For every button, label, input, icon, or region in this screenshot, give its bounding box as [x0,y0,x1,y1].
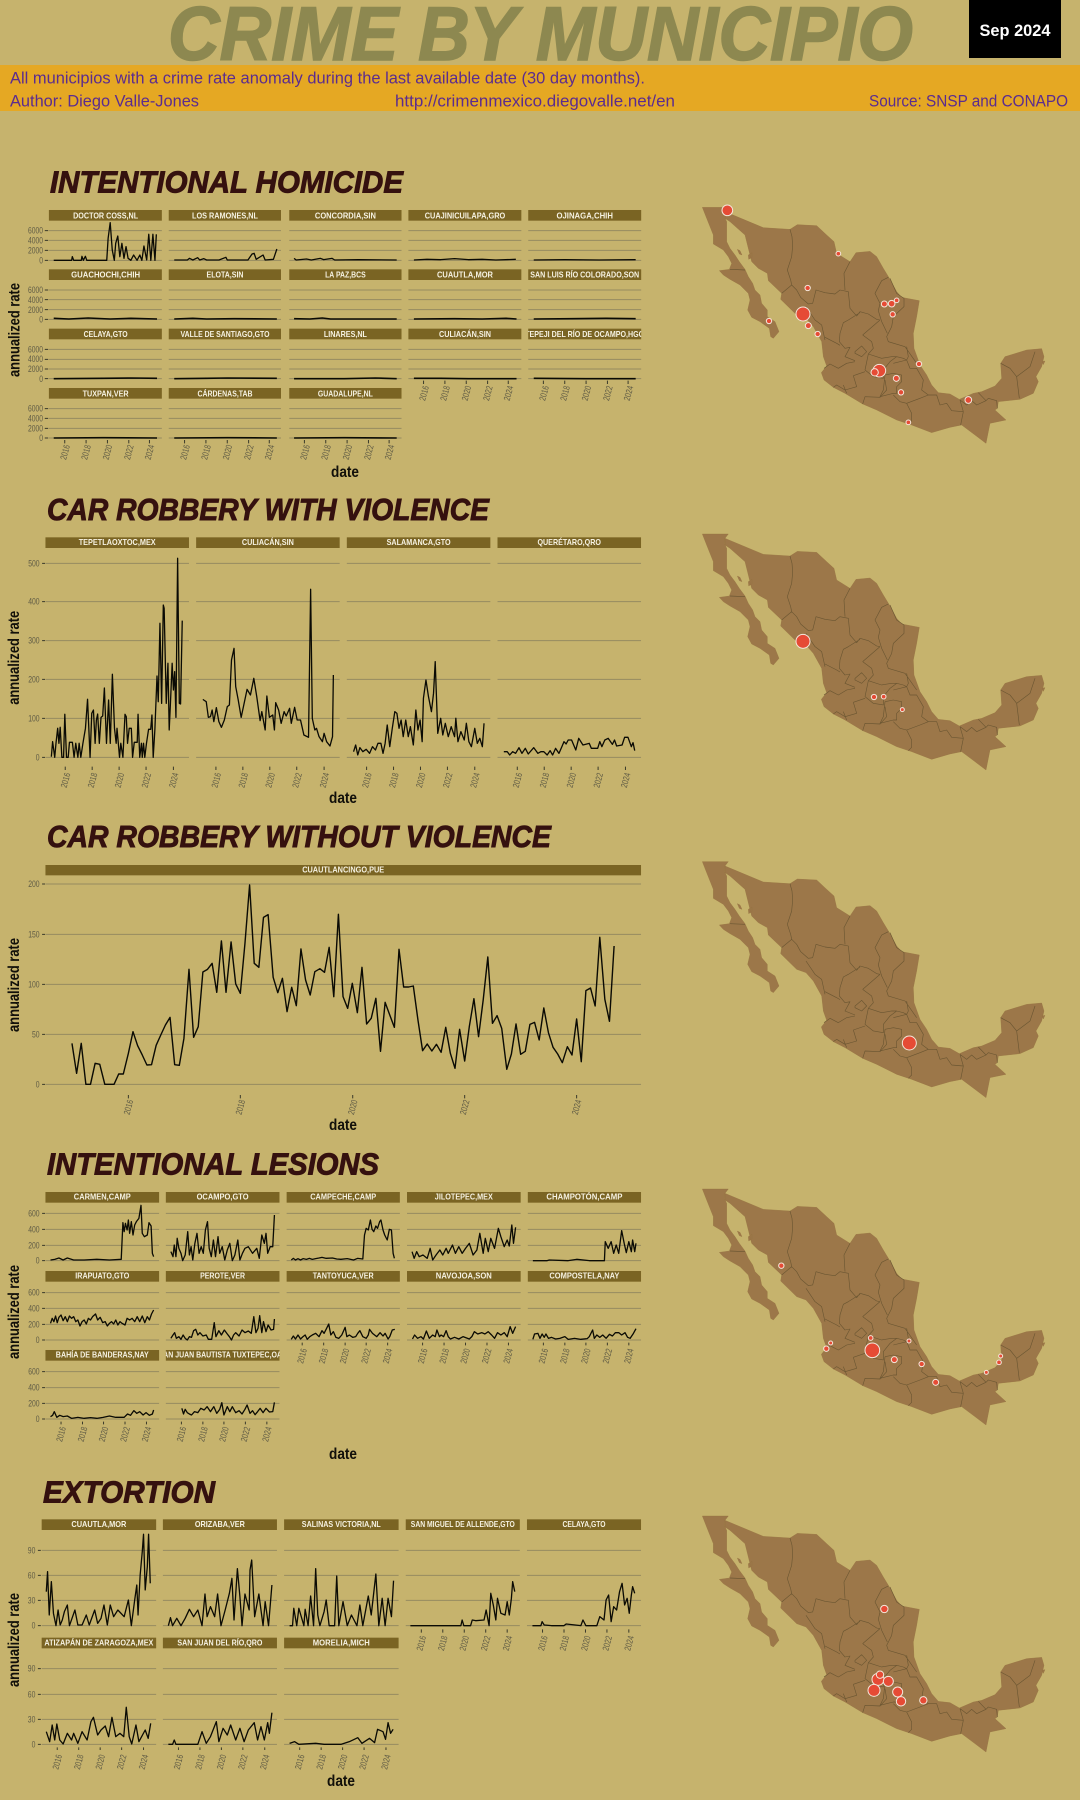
panel: Irapuato [45,1271,159,1340]
panel: Culiacan [196,537,340,757]
x axis labels: 2024 [622,385,635,402]
y axis labels: 4000 [28,354,43,364]
x axis labels: 2020 [215,1753,228,1770]
author: Author: Diego Valle-Jones [10,92,199,110]
panel: Tepeji del Rio de Ocampo: TEPEJI DEL RÍO DE OCAMPO,HGO [525,329,645,339]
axis title: annualized rate: annualized rate [6,610,23,705]
panel: Celaya [527,1519,641,1626]
x axis labels: 2016 [175,1426,188,1443]
y axis labels: 4000 [28,413,43,423]
x axis labels: 2020 [579,1635,593,1652]
x axis labels: 2020 [221,444,234,461]
panel: Tantoyuca [287,1271,400,1340]
panel: Champoton [528,1191,641,1261]
panel: Morelia [284,1637,399,1744]
y axis labels: 0 [36,1335,40,1345]
axis title: annualized rate: annualized rate [6,1593,23,1687]
panel: Navojoa: NAVOJOA,SON [436,1271,492,1281]
x axis labels: 2022 [601,385,615,402]
description: All municipios with a crime rate anomaly during the last available date (30 day months). [10,69,645,87]
x axis labels: 2016 [511,772,524,789]
panel: Cardenas [169,388,281,438]
panel: Campeche [287,1192,400,1261]
x axis labels: 2022 [458,1099,471,1116]
section: car robbery with violence [6,492,1045,807]
axis title: date: date [329,790,357,807]
x axis labels: 2016 [536,1635,550,1652]
x axis labels: 2024 [318,772,331,789]
x axis labels: 2024 [570,1099,583,1116]
y axis labels: 200 [28,1240,40,1250]
x axis labels: 2020 [579,1347,593,1364]
x axis labels: 2018 [72,1753,86,1770]
x axis labels: 2016 [58,444,72,461]
panel: Guachochi [49,269,162,319]
x axis labels: 2018 [437,1347,451,1364]
panel: Tepetlaoxtoc [45,537,189,757]
panel: Morelia: MORELIA,MICH [313,1637,370,1647]
x axis labels: 2016 [416,1347,429,1364]
y axis labels: 0 [39,315,43,325]
panel: La Paz [289,269,402,319]
y axis labels: 30 [28,1595,35,1605]
panel: Tepeji del Rio de Ocampo [525,329,645,379]
panel: Atizapan de Zaragoza [42,1637,156,1744]
x axis labels: 2024 [263,444,276,461]
x axis labels: 2020 [263,772,277,789]
x axis labels: 2024 [167,772,181,789]
axis title: date: date [327,1773,355,1790]
panel: San Juan del Rio [163,1637,277,1744]
y axis labels: 100 [28,713,40,723]
section: intentional homicide [6,164,1045,481]
y axis labels [28,879,45,1089]
x axis labels: 2024 [501,1635,514,1652]
panel: San Luis Rio Colorado [528,269,641,319]
y axis labels: 200 [28,674,40,684]
x axis labels: 2022 [118,1426,132,1443]
date badge: Sep 2024 [980,22,1051,40]
panel: Navojoa [407,1271,521,1340]
panel: Doctor Coss: DOCTOR COSS,NL [73,210,138,220]
x axis labels: 2016 [54,1426,68,1443]
x axis labels: 2024 [622,1635,636,1652]
x axis labels: 2024 [468,772,482,789]
x axis labels: 2020 [346,1099,360,1116]
y axis labels: 200 [28,1319,40,1329]
panel: Culiacan: CULIACÁN,SIN [439,329,491,339]
y axis labels: 60 [28,1570,35,1580]
panel: Salinas Victoria: SALINAS VICTORIA,NL [302,1519,381,1529]
x axis labels: 2018 [314,1753,328,1770]
x axis labels: 2020 [458,1635,471,1652]
panel: Compostela: COMPOSTELA,NAY [549,1271,620,1281]
x axis labels: 2020 [341,444,354,461]
map: car robbery without violence [702,862,1045,1098]
y axis labels: 2000 [28,246,43,256]
panel: Cuautlancingo: CUAUTLANCINGO,PUE [302,864,384,874]
x axis labels: 2020 [217,1426,231,1443]
x axis labels: 2016 [537,385,551,402]
x axis labels: 2022 [601,1347,614,1364]
x axis labels: 2018 [558,1347,572,1364]
y axis labels: 0 [39,433,43,443]
panel: Cuautla [42,1519,156,1626]
map: homicide [702,205,1045,443]
y axis labels [28,558,45,762]
y axis labels: 0 [36,1414,40,1424]
panel: Celaya: CELAYA,GTO [562,1519,606,1529]
map: extortion [702,1516,1045,1752]
panel: Campeche: CAMPECHE,CAMP [310,1192,376,1202]
panel: Champoton: CHAMPOTÓN,CAMP [546,1191,623,1202]
panel: Culiacan: CULIACÁN,SIN [242,537,294,547]
axis title: date: date [329,1117,357,1134]
x axis labels: 2022 [290,772,304,789]
x axis labels [122,1095,583,1116]
axis title: date: date [331,464,359,481]
axis title: annualized rate: annualized rate [6,938,23,1032]
panel: Valle de Santiago [169,329,281,379]
x axis labels [54,1343,636,1443]
url: http://crimenmexico.diegovalle.net/en [395,92,675,110]
y axis labels: 0 [36,752,40,762]
x axis labels: 2020 [101,444,114,461]
panel: Orizaba: ORIZABA,VER [195,1519,245,1529]
panel: Tuxpan: TUXPAN,VER [83,388,129,398]
panel: Culiacan [408,329,521,379]
panel: Carmen: CARMEN,CAMP [74,1192,131,1202]
panel: Los Ramones: LOS RAMONES,NL [192,210,258,220]
x axis labels: 2018 [538,772,551,789]
x axis labels: 2016 [293,1753,306,1770]
x axis labels [51,1629,636,1770]
x axis labels: 2016 [360,772,374,789]
panel: San Juan Bautista Tuxtepec [166,1350,280,1420]
y axis labels [28,226,48,443]
x axis labels: 2016 [298,444,312,461]
y axis labels: 0 [32,1621,35,1631]
x axis labels: 2024 [140,1426,153,1443]
panel: Cuajinicuilapa: CUAJINICUILAPA,GRO [425,210,506,220]
panel: San Juan Bautista Tuxtepec: SAN JUAN BAUTISTA TUXTEPEC,OAX [159,1350,287,1360]
y axis labels: 0 [32,1739,35,1749]
map: intentional lesions [702,1189,1045,1425]
x axis labels: 2020 [565,772,578,789]
panel: Carmen [45,1192,159,1261]
y axis labels: 0 [39,374,43,384]
panel: Cuautla: CUAUTLA,MOR [71,1519,126,1529]
x axis labels [59,767,632,789]
panel: Perote [166,1271,279,1340]
x axis labels: 2024 [258,1753,272,1770]
y axis labels: 600 [28,1288,40,1298]
panel: Guachochi: GUACHOCHI,CHIH [71,270,140,280]
x axis labels: 2016 [122,1099,135,1116]
x axis labels: 2024 [502,385,515,402]
info band [0,65,1080,111]
x axis labels: 2020 [414,772,428,789]
panel: Jilotepec: JILOTEPEC,MEX [435,1192,493,1202]
panel: Guadalupe: GUADALUPE,NL [318,388,373,398]
y axis labels: 2000 [28,423,43,433]
x axis labels: 2022 [479,1635,492,1652]
panel: Irapuato: IRAPUATO,GTO [75,1271,130,1281]
y axis labels: 2000 [28,364,43,374]
x axis labels: 2024 [619,772,632,789]
y axis labels: 500 [28,558,40,568]
panel: Concordia: CONCORDIA,SIN [315,210,376,220]
x axis labels: 2020 [580,385,593,402]
x axis labels: 2018 [199,444,213,461]
x axis labels: 2022 [357,1753,371,1770]
x axis labels: 2022 [236,1753,250,1770]
x axis labels: 2018 [558,385,572,402]
x axis labels: 2018 [79,444,93,461]
y axis labels: 0 [36,1079,40,1089]
x axis labels: 2022 [481,385,495,402]
panel: Salinas Victoria [284,1519,399,1626]
y axis labels: 60 [28,1689,35,1699]
axis title: annualized rate: annualized rate [6,283,24,377]
x axis labels: 2022 [122,444,136,461]
panel: Ocampo: OCAMPO,GTO [197,1192,249,1202]
date badge [969,0,1061,58]
y axis labels: 6000 [28,285,43,295]
x axis labels: 2016 [210,772,223,789]
y axis labels: 150 [28,929,40,939]
section: car robbery without violence [6,819,1045,1134]
x axis labels: 2016 [178,444,192,461]
panel: San Miguel de Allende: SAN MIGUEL DE ALLENDE,GTO [411,1519,515,1529]
panel: San Juan del Rio: SAN JUAN DEL RÍO,QRO [177,1637,263,1647]
x axis labels: 2024 [501,1347,515,1364]
x axis labels: 2022 [239,1426,252,1443]
panel: Los Ramones [169,210,281,260]
axis title: annualized rate: annualized rate [6,1265,23,1359]
heading: EXTORTION [43,1474,216,1510]
x axis labels: 2022 [592,772,605,789]
x axis labels: 2024 [381,1347,394,1364]
x axis labels: 2022 [601,1635,614,1652]
panel: Atizapan de Zaragoza: ATIZAPÁN DE ZARAGOZA,MEX [44,1637,154,1647]
x axis labels: 2024 [143,444,156,461]
y axis labels: 6000 [28,226,43,236]
x axis labels: 2018 [438,385,452,402]
y axis labels: 400 [28,1303,40,1313]
x axis labels: 2018 [558,1635,571,1652]
x axis labels: 2018 [436,1635,450,1652]
x axis labels: 2020 [458,1347,472,1364]
x axis labels: 2022 [362,444,376,461]
panel: Cuautlancingo [45,864,641,1084]
panel: Cuautla: CUAUTLA,MOR [437,270,493,280]
x axis labels: 2016 [172,1753,185,1770]
x axis labels: 2016 [295,1347,309,1364]
y axis labels: 4000 [28,236,43,246]
panel: Linares: LINARES,NL [324,329,367,339]
panel: Celaya [49,329,162,379]
heading: CAR ROBBERY WITHOUT VIOLENCE [47,819,552,854]
x axis labels: 2016 [537,1347,550,1364]
y axis labels: 0 [39,255,43,265]
x axis labels: 2018 [196,1426,210,1443]
x axis labels: 2018 [319,444,333,461]
x axis labels: 2018 [234,1099,247,1116]
y axis labels: 600 [28,1367,40,1377]
x axis labels: 2020 [94,1753,107,1770]
section: extortion [6,1474,1045,1790]
y axis labels: 30 [28,1714,35,1724]
x axis labels: 2020 [460,385,473,402]
x axis labels: 2022 [140,772,153,789]
panel: Tuxpan [49,388,162,438]
x axis labels: 2024 [260,1426,274,1443]
x axis labels: 2020 [336,1753,349,1770]
x axis labels: 2018 [86,772,99,789]
panel: Bahia de Banderas: BAHÍA DE BANDERAS,NAY [56,1350,149,1360]
panel: Queretaro: QUERÉTARO,QRO [537,537,601,547]
y axis labels: 200 [28,1398,40,1408]
panel: Cardenas: CÁRDENAS,TAB [198,388,252,398]
y axis labels: 90 [28,1545,35,1555]
panel: Perote: PEROTE,VER [200,1271,245,1281]
x axis labels: 2024 [137,1753,150,1770]
map: car robbery with violence [702,534,1045,770]
axis title: date: date [329,1446,357,1463]
x axis labels: 2022 [242,444,256,461]
y axis labels: 200 [28,879,40,889]
y axis labels: 4000 [28,295,43,305]
x axis labels: 2016 [59,772,72,789]
y axis labels: 50 [32,1029,40,1039]
source: Source: SNSP and CONAPO [869,92,1068,110]
x axis labels: 2018 [193,1753,207,1770]
panel: Guadalupe [289,388,402,438]
x axis labels: 2022 [441,772,454,789]
y axis labels: 0 [36,1256,40,1266]
panel: Jilotepec [407,1192,521,1261]
panel: La Paz: LA PAZ,BCS [325,270,366,280]
heading: CAR ROBBERY WITH VIOLENCE [47,492,490,527]
panel: Concordia [289,210,402,260]
x axis labels: 2024 [622,1347,636,1364]
x axis labels: 2022 [115,1753,128,1770]
x axis labels: 2024 [383,444,396,461]
panel: Tantoyuca: TANTOYUCA,VER [313,1271,374,1281]
panel: Cuajinicuilapa [408,210,521,260]
panel: Ojinaga [528,210,641,260]
x axis labels: 2018 [387,772,401,789]
panel: Doctor Coss [49,210,162,260]
panel: Elota: ELOTA,SIN [206,270,244,280]
y axis labels: 400 [28,1224,40,1234]
y axis labels: 300 [28,636,40,646]
x axis labels: 2016 [415,1635,428,1652]
panel: Queretaro [498,537,641,757]
x axis labels: 2018 [76,1426,89,1443]
panel: Ojinaga: OJINAGA,CHIH [556,210,613,220]
y axis labels: 100 [28,979,40,989]
y axis labels: 400 [28,597,40,607]
heading: INTENTIONAL HOMICIDE [50,164,404,200]
x axis labels: 2020 [113,772,126,789]
y axis labels [28,1545,41,1749]
panel: Salamanca: SALAMANCA,GTO [387,537,451,547]
y axis labels: 90 [28,1664,35,1674]
panel: Ocampo [166,1192,279,1261]
x axis labels: 2020 [97,1426,110,1443]
x axis labels: 2018 [237,772,250,789]
panel: Salamanca [347,537,490,757]
x axis labels: 2024 [379,1753,393,1770]
y axis labels: 2000 [28,305,43,315]
panel: Tepetlaoxtoc: TEPETLAOXTOC,MEX [79,537,156,547]
panel: San Luis Rio Colorado: SAN LUIS RÍO COLORADO,SON [530,270,639,280]
x axis labels [58,381,635,461]
heading: INTENTIONAL LESIONS [47,1146,379,1182]
panel: Orizaba [163,1519,277,1626]
y axis labels: 6000 [28,344,43,354]
panel: Cuautla [408,269,521,319]
panel: Elota [169,269,281,319]
y axis labels: 400 [28,1383,40,1393]
panel: Valle de Santiago: VALLE DE SANTIAGO,GTO [180,329,270,339]
y axis labels [28,1208,45,1424]
x axis labels: 2020 [338,1347,351,1364]
y axis labels: 6000 [28,404,43,414]
x axis labels: 2018 [317,1347,330,1364]
x axis labels: 2016 [417,385,431,402]
y axis labels: 600 [28,1208,40,1218]
panel: Bahia de Banderas [45,1350,159,1419]
x axis labels: 2022 [359,1347,373,1364]
x axis labels: 2022 [480,1347,493,1364]
panel: Compostela [528,1271,641,1340]
panel: Celaya: CELAYA,GTO [84,329,128,339]
panel: Linares [289,329,402,379]
panel: San Miguel de Allende [406,1519,520,1626]
section: intentional lesions [6,1146,1045,1463]
x axis labels: 2016 [51,1753,64,1770]
